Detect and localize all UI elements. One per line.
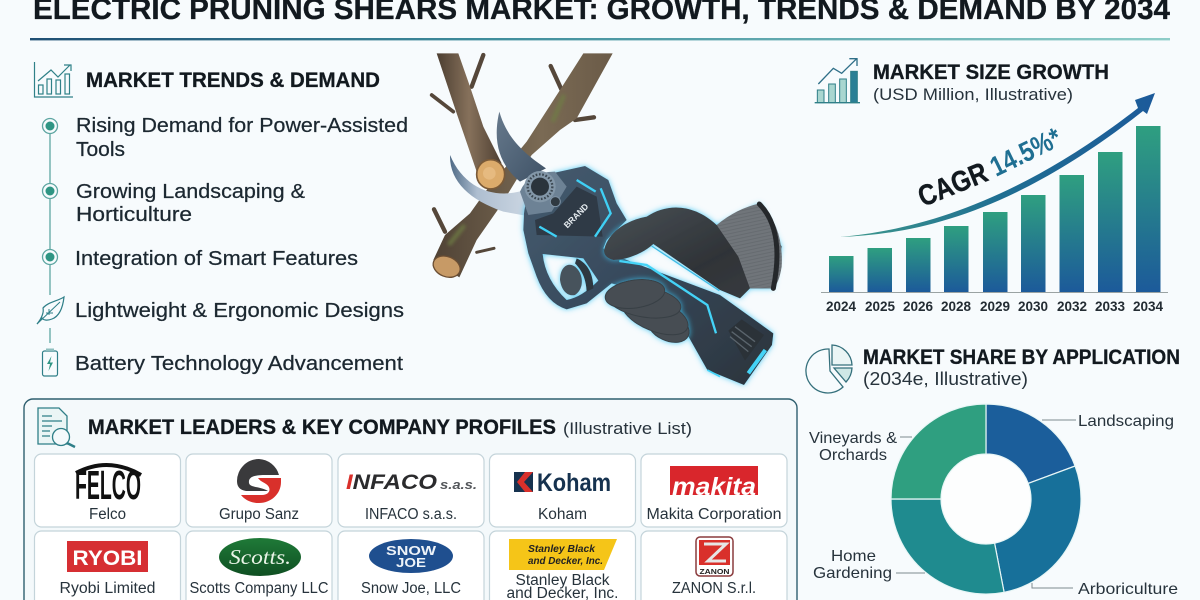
card: INFACO	[338, 454, 484, 527]
panel: market trends and demand	[34, 62, 408, 376]
card: Felco: Felco	[89, 506, 126, 523]
year labels: 2029	[980, 299, 1010, 314]
icon: trend chart	[34, 62, 73, 97]
year labels	[826, 299, 1164, 314]
brand mark: BRAND	[562, 201, 590, 230]
card: Zanon: ZANON S.r.l.	[672, 580, 756, 597]
year labels: 2032	[1057, 299, 1087, 314]
CAGR callout: 14.5%*	[985, 122, 1066, 182]
label: home gardening: Gardening	[813, 565, 892, 582]
label: vineyards and orchards: Vineyards &	[809, 430, 897, 447]
card: Koham	[490, 454, 636, 527]
year labels: 2028	[941, 299, 972, 314]
trend item 4 with leaf icon	[37, 297, 404, 324]
card: Snow Joe: Snow Joe, LLC	[361, 580, 461, 597]
glove	[604, 203, 782, 298]
card: INFACO: s.a.s.	[440, 477, 477, 492]
trend item 4 with leaf icon: Lightweight & Ergonomic Designs	[75, 300, 404, 322]
card: Scotts	[186, 531, 332, 600]
label: home gardening	[813, 548, 925, 582]
bars	[829, 126, 1160, 292]
trend item 1: Rising Demand for Power-Assisted	[76, 115, 408, 137]
donut chart	[891, 404, 1081, 594]
card: Scotts: Scotts.	[229, 545, 291, 569]
segment: landscaping	[986, 404, 1075, 483]
year labels: 2024	[826, 299, 857, 314]
card: Koham: Koham	[538, 506, 587, 523]
growth arrow	[840, 93, 1155, 237]
card: Zanon: ZANON	[700, 567, 730, 576]
icon: document with magnifier	[38, 408, 75, 447]
branches	[430, 53, 613, 281]
year labels: 2034	[1133, 299, 1164, 314]
subheading: units: (USD Million, Illustrative)	[873, 85, 1073, 104]
card: Makita: Makita Corporation	[646, 506, 782, 523]
card: Stanley Black and Decker: Stanley Black	[516, 572, 610, 589]
card: INFACO: INFACO	[346, 471, 437, 494]
card: Felco	[34, 454, 180, 527]
CAGR callout	[914, 122, 1066, 213]
card: Felco: FELCO	[75, 462, 141, 508]
label: landscaping	[1042, 413, 1174, 430]
panel: market leaders and company profiles	[24, 399, 797, 600]
trend item 1: Tools	[76, 139, 125, 161]
timeline connector	[49, 126, 51, 343]
card: Stanley Black and Decker	[490, 531, 636, 600]
year labels: 2033	[1095, 299, 1126, 314]
card: Koham: Koham	[537, 469, 611, 497]
illustration: electric pruning shears in gloved hand	[430, 53, 782, 385]
heading: market size: MARKET SIZE GROWTH	[873, 61, 1109, 84]
label: landscaping: Landscaping	[1078, 413, 1174, 430]
card: INFACO: INFACO s.a.s.	[365, 506, 457, 523]
year labels: 2026	[903, 299, 934, 314]
icon: growth bars	[815, 59, 860, 103]
card: Snow Joe	[338, 531, 484, 600]
subheading: list note: (Illustrative List)	[563, 419, 692, 438]
heading: market leaders: MARKET LEADERS & KEY COMPANY PROFILES	[88, 416, 556, 439]
blades	[450, 112, 546, 215]
year labels: 2025	[865, 299, 896, 314]
subheading: year: (2034e, Illustrative)	[863, 369, 1028, 389]
trend item 2	[42, 181, 306, 226]
card: Stanley Black and Decker: Stanley Black	[528, 543, 596, 555]
label: arboriculture: Arboriculture	[1078, 581, 1178, 598]
pivot and adjuster	[520, 171, 611, 237]
chart: market share by application	[806, 345, 1180, 598]
card: Snow Joe: JOE	[396, 555, 426, 570]
label: arboriculture	[1032, 581, 1178, 598]
trend item 3: Integration of Smart Features	[75, 248, 358, 270]
label: home gardening: Home	[831, 548, 876, 565]
card: Zanon	[641, 531, 787, 600]
trend item 2: Growing Landscaping &	[76, 181, 306, 203]
icon: pie chart	[806, 345, 852, 393]
trend item 5 with battery icon: Battery Technology Advancement	[75, 353, 403, 375]
year labels: 2030	[1018, 299, 1048, 314]
card: Snow Joe: SNOW	[386, 543, 437, 558]
heading: market trends: MARKET TRENDS & DEMAND	[86, 69, 380, 92]
handle light strips and battery	[619, 246, 765, 377]
tool body	[523, 166, 773, 385]
CAGR callout: CAGR	[914, 157, 992, 213]
segment: arboriculture	[995, 466, 1081, 592]
card: Stanley Black and Decker: and Decker, Inc.	[528, 555, 603, 567]
card: Ryobi	[34, 531, 180, 600]
card: Grupo Sanz: Grupo Sanz	[219, 506, 299, 523]
label: vineyards and orchards: Orchards	[819, 447, 887, 464]
label: vineyards and orchards	[809, 430, 912, 464]
segment: home gardening	[891, 499, 1004, 594]
card: Scotts: Scotts Company LLC	[190, 580, 328, 597]
trend item 5 with battery icon	[42, 348, 403, 376]
segment: vineyards and orchards	[891, 404, 986, 499]
gripping fingers	[603, 276, 694, 349]
chart: market size growth	[815, 59, 1168, 314]
trend item 1	[42, 115, 408, 161]
card: Grupo Sanz	[186, 454, 332, 527]
card: Makita	[641, 454, 787, 527]
card: Makita: makita	[672, 473, 756, 501]
card: Ryobi: Ryobi Limited	[60, 580, 156, 597]
card: Ryobi: RYOBI	[72, 547, 142, 570]
trend item 2: Horticulture	[76, 204, 192, 226]
